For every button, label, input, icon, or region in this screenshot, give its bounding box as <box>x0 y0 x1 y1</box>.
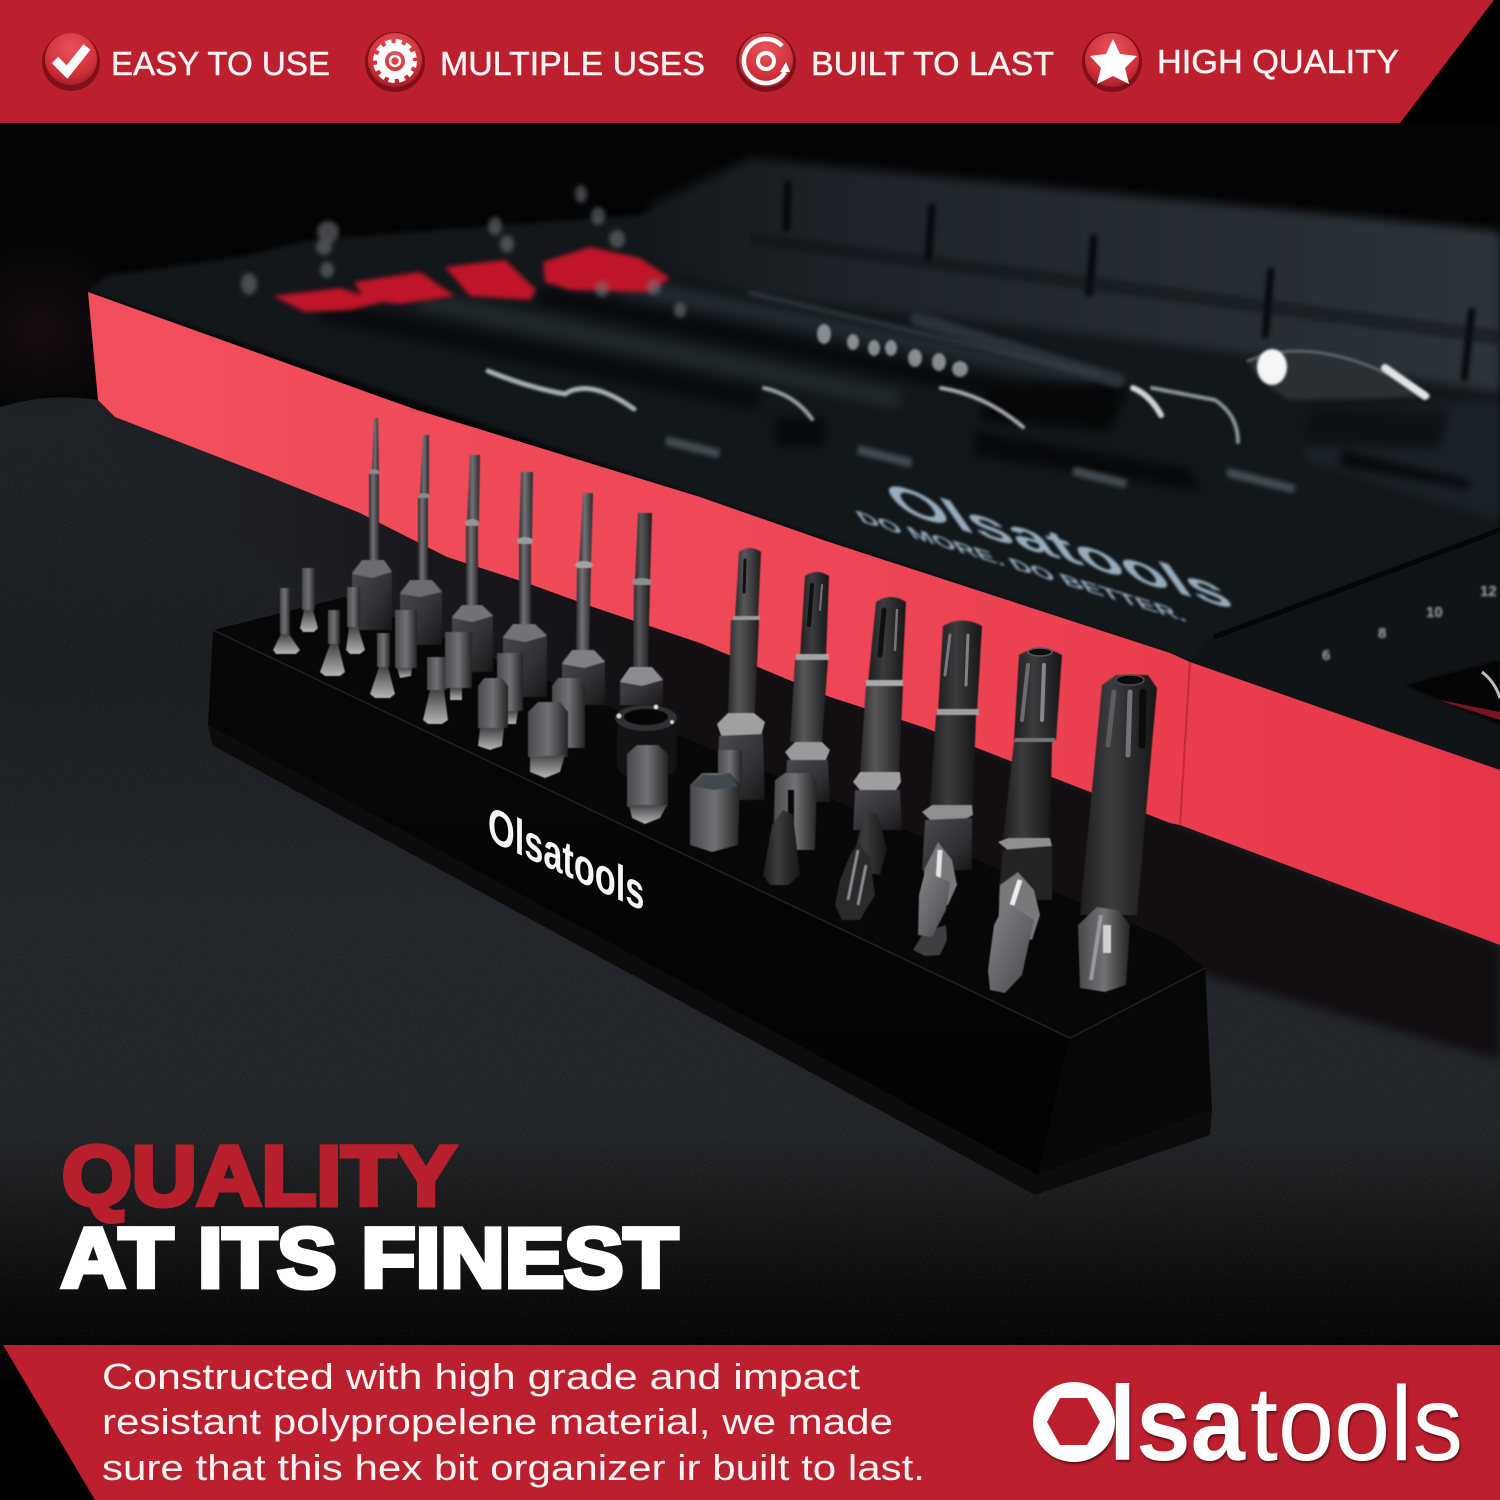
shiny mirror highlight <box>1257 349 1287 385</box>
phillips bit p front <box>835 843 875 920</box>
tray printed logo: Olsatools <box>872 472 1245 621</box>
bit 7 <box>717 548 765 800</box>
label: multiple uses: MULTIPLE USES <box>440 45 705 82</box>
photo background: dark upper area <box>0 124 1500 800</box>
socket <box>615 704 677 776</box>
brand logo: Olsa <box>1033 1365 1246 1483</box>
tray printed logo: DO MORE. DO BETTER. <box>850 506 1191 626</box>
tool tray top surface <box>88 175 1500 790</box>
tray lid with segments <box>650 158 1500 392</box>
small bit h <box>445 632 472 700</box>
blade q <box>913 871 950 956</box>
small bit c <box>320 610 345 676</box>
phillips bit p <box>850 808 887 875</box>
heading: quality: QUALITY <box>62 1129 456 1223</box>
bit 3 <box>452 455 493 672</box>
logo on holder: Olsatools <box>488 794 644 922</box>
medium bit k <box>528 702 568 778</box>
heading: at its finest: AT ITS FINEST <box>61 1211 678 1305</box>
bottom banner <box>3 1345 1500 1500</box>
socket marks row <box>817 324 968 377</box>
holder rubber base <box>208 725 1212 1195</box>
description text: Constructed with high grade and impact <box>102 1356 860 1397</box>
small bit g <box>423 657 448 724</box>
icon: star <box>1082 32 1142 92</box>
brand logo: tools <box>1250 1365 1463 1483</box>
holder front face <box>208 630 1070 1175</box>
label: built to last: BUILT TO LAST <box>811 45 1054 82</box>
small bit f <box>395 610 417 678</box>
blade r <box>988 902 1034 993</box>
bit 11 <box>998 648 1062 900</box>
organizer holder <box>208 597 1212 1195</box>
phillips bit s <box>1078 907 1130 992</box>
blurred steel dots behind tray <box>241 185 686 318</box>
shadow beneath foam tray <box>98 400 1500 1060</box>
bit 10 <box>922 620 982 870</box>
medium bit i <box>478 678 508 750</box>
phillips bit q <box>924 842 957 905</box>
short bits, front rows <box>273 568 1130 993</box>
holder end face <box>1038 968 1212 1175</box>
icon: gear in cycle arrow <box>736 32 796 92</box>
description text: resistant polypropelene material, we made <box>102 1401 893 1442</box>
blurred size labels on tray <box>665 436 1296 494</box>
medium bit j <box>497 653 523 724</box>
bit 12 <box>1080 675 1157 915</box>
bit 2 <box>400 435 442 645</box>
second tray panel with numbers: 8 <box>1378 625 1386 642</box>
phillips bit r <box>998 872 1040 940</box>
small bit d <box>346 587 365 654</box>
second tray panel with numbers: 12 <box>1480 583 1497 600</box>
second tray panel with numbers: 6 <box>1322 647 1330 664</box>
brand logo <box>1033 1365 1463 1483</box>
second tray panel with numbers <box>1190 530 1500 775</box>
torx flutes <box>744 560 1144 755</box>
description text <box>102 1356 925 1488</box>
mirror lens in tray <box>1248 351 1429 400</box>
bit 5 <box>562 493 605 705</box>
red tool cut-outs in tray <box>273 247 670 312</box>
torx bit o <box>773 773 817 850</box>
hex bit m <box>627 745 668 824</box>
square bit o front <box>763 810 800 885</box>
floor texture grain <box>0 390 1500 1290</box>
hex bit behind n <box>718 750 742 783</box>
bit 1 <box>352 418 392 630</box>
description text: sure that this hex bit organizer ir built to last. <box>102 1447 925 1488</box>
wrenches and hooks in tray <box>488 293 1429 442</box>
small bit e <box>370 633 395 698</box>
medium bit l <box>552 678 585 748</box>
long bits, back row <box>352 418 1157 915</box>
small bit a <box>273 588 300 654</box>
bit 8 <box>785 572 830 802</box>
header banner <box>0 0 1494 123</box>
label: high quality: HIGH QUALITY <box>1157 43 1399 80</box>
icon: gear <box>365 32 425 92</box>
foam seam <box>1180 662 1190 825</box>
dim left wall tint <box>0 240 140 420</box>
holder top face <box>213 597 1205 1038</box>
label: easy to use: EASY TO USE <box>111 45 330 82</box>
red foam edge of tray <box>88 292 1500 945</box>
small bit b <box>300 568 318 632</box>
black corner beside header <box>1380 0 1500 124</box>
tray foam grooves <box>320 285 1500 520</box>
bit 9 <box>853 597 906 830</box>
hex bit n <box>690 773 740 852</box>
bit 6 <box>620 513 663 705</box>
second tray panel with numbers: 10 <box>1426 604 1443 621</box>
bit 4 <box>503 472 547 697</box>
icon: check mark <box>42 33 100 91</box>
